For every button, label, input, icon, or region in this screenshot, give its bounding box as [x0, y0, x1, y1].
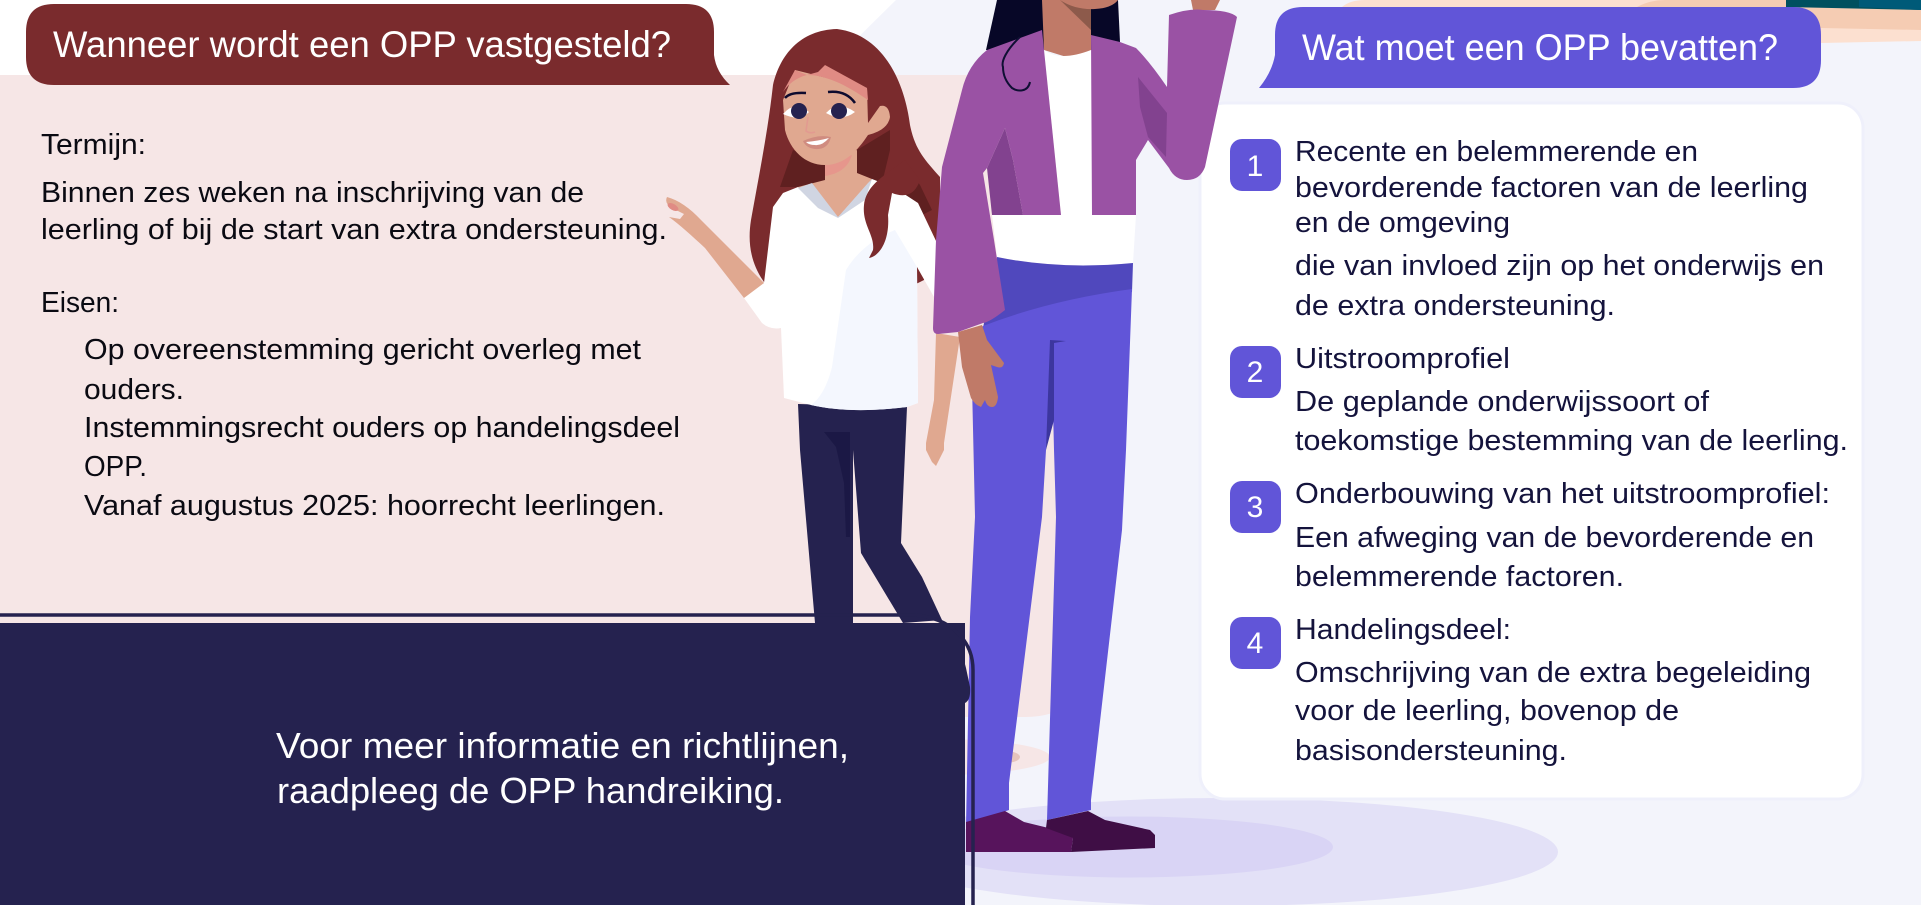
speech bubble heading: wanneer: Wanneer wordt een OPP vastgesteld? [53, 24, 671, 65]
girl shirt shading [811, 230, 918, 410]
woman shoe right [1046, 811, 1155, 852]
panel: pink background [0, 75, 1085, 775]
text block: eisen: Vanaf augustus 2025: hoorrecht leerlingen. [84, 490, 665, 522]
panel outline [0, 615, 973, 905]
item 1: 1 [1247, 150, 1263, 183]
speech bubble heading: wat moet: Wat moet een OPP bevatten? [1302, 27, 1778, 68]
woman hair strand [1003, 37, 1030, 90]
girl nose [806, 117, 815, 133]
woman trouser fold [1046, 340, 1066, 450]
item 3: Onderbouwing van het uitstroomprofiel: [1295, 478, 1830, 510]
girl lower leg overlapping panel [925, 620, 970, 703]
woman jacket dark panels [987, 128, 1023, 215]
girl neck [798, 150, 872, 217]
text block: eisen: OPP. [84, 451, 147, 483]
illustration: woman [933, 0, 1237, 852]
item 2 [1230, 343, 1848, 457]
item 4: Omschrijving van de extra begeleiding [1295, 657, 1811, 689]
text block: eisen: Eisen: [41, 287, 119, 319]
text block: eisen: ouders. [84, 374, 184, 406]
text block: termijn [41, 129, 667, 246]
girl eyes and eyebrows [783, 92, 855, 119]
girl shirt [744, 179, 937, 410]
text block: eisen [41, 287, 680, 522]
girl hair back [750, 29, 940, 290]
speech bubble heading: wanneer [26, 4, 730, 85]
item 1: en de omgeving [1295, 207, 1510, 239]
text block: eisen: Op overeenstemming gericht overleg met [84, 334, 641, 366]
woman hand [958, 325, 1004, 407]
text block: termijn: Termijn: [41, 129, 146, 161]
item 2: 2 [1247, 356, 1263, 389]
text block: termijn: Binnen zes weken na inschrijving van de [41, 177, 584, 209]
woman hair [986, 0, 1120, 50]
item 4: 4 [1247, 627, 1263, 660]
item 4: basisondersteuning. [1295, 735, 1567, 767]
girl raised arm [666, 197, 764, 298]
item 1: die van invloed zijn op het onderwijs en [1295, 250, 1824, 282]
girl collar [798, 179, 872, 218]
illustration: girl [666, 29, 960, 623]
woman trousers waist shadow [983, 257, 1133, 328]
item 2: toekomstige bestemming van de leerling. [1295, 425, 1848, 457]
item 3: Een afweging van de bevorderende en [1295, 522, 1814, 554]
panel: call to action: Voor meer informatie en richtlijnen, [276, 725, 849, 766]
girl front hair strand [864, 160, 920, 258]
panel: call to action: raadpleeg de OPP handreiking. [277, 770, 784, 811]
text block: eisen: Instemmingsrecht ouders op handelingsdeel [84, 412, 680, 444]
panel: opp contents card [1200, 103, 1863, 799]
woman shoe left [966, 811, 1073, 852]
girl neck shadow [825, 155, 852, 176]
girl mouth [803, 136, 831, 149]
girl forehead shadow [783, 65, 868, 100]
item 2: De geplande onderwijssoort of [1295, 386, 1710, 418]
girl lowered arm [926, 333, 960, 466]
girl trousers [798, 404, 942, 623]
woman trousers [966, 289, 1132, 825]
woman raised hand [1191, 0, 1220, 10]
floor shadow ellipses [882, 798, 1558, 905]
woman neck [1042, 0, 1091, 59]
panel: call to action [0, 623, 965, 905]
item 3: belemmerende factoren. [1295, 561, 1624, 593]
woman chin [1060, 0, 1118, 9]
item 1 [1230, 136, 1824, 322]
item 1: de extra ondersteuning. [1295, 290, 1615, 322]
woman white top [992, 50, 1136, 265]
item 1: bevorderende factoren van de leerling [1295, 172, 1808, 204]
girl hair shadow [780, 130, 932, 215]
woman chin shadow [1060, 0, 1091, 30]
item 4: Handelingsdeel: [1295, 614, 1511, 646]
item 4: voor de leerling, bovenop de [1295, 695, 1679, 727]
text block: termijn: leerling of bij de start van extra ondersteuning. [41, 214, 667, 246]
item 3 [1230, 478, 1830, 593]
girl trouser fold [824, 432, 850, 537]
speech bubble heading: wat moet [1259, 7, 1821, 88]
item 1: Recente en belemmerende en [1295, 136, 1698, 168]
girl face [783, 70, 890, 165]
item 3: 3 [1247, 491, 1263, 524]
item 2: Uitstroomprofiel [1295, 343, 1510, 375]
woman jacket [933, 10, 1237, 334]
item 4 [1230, 614, 1811, 767]
